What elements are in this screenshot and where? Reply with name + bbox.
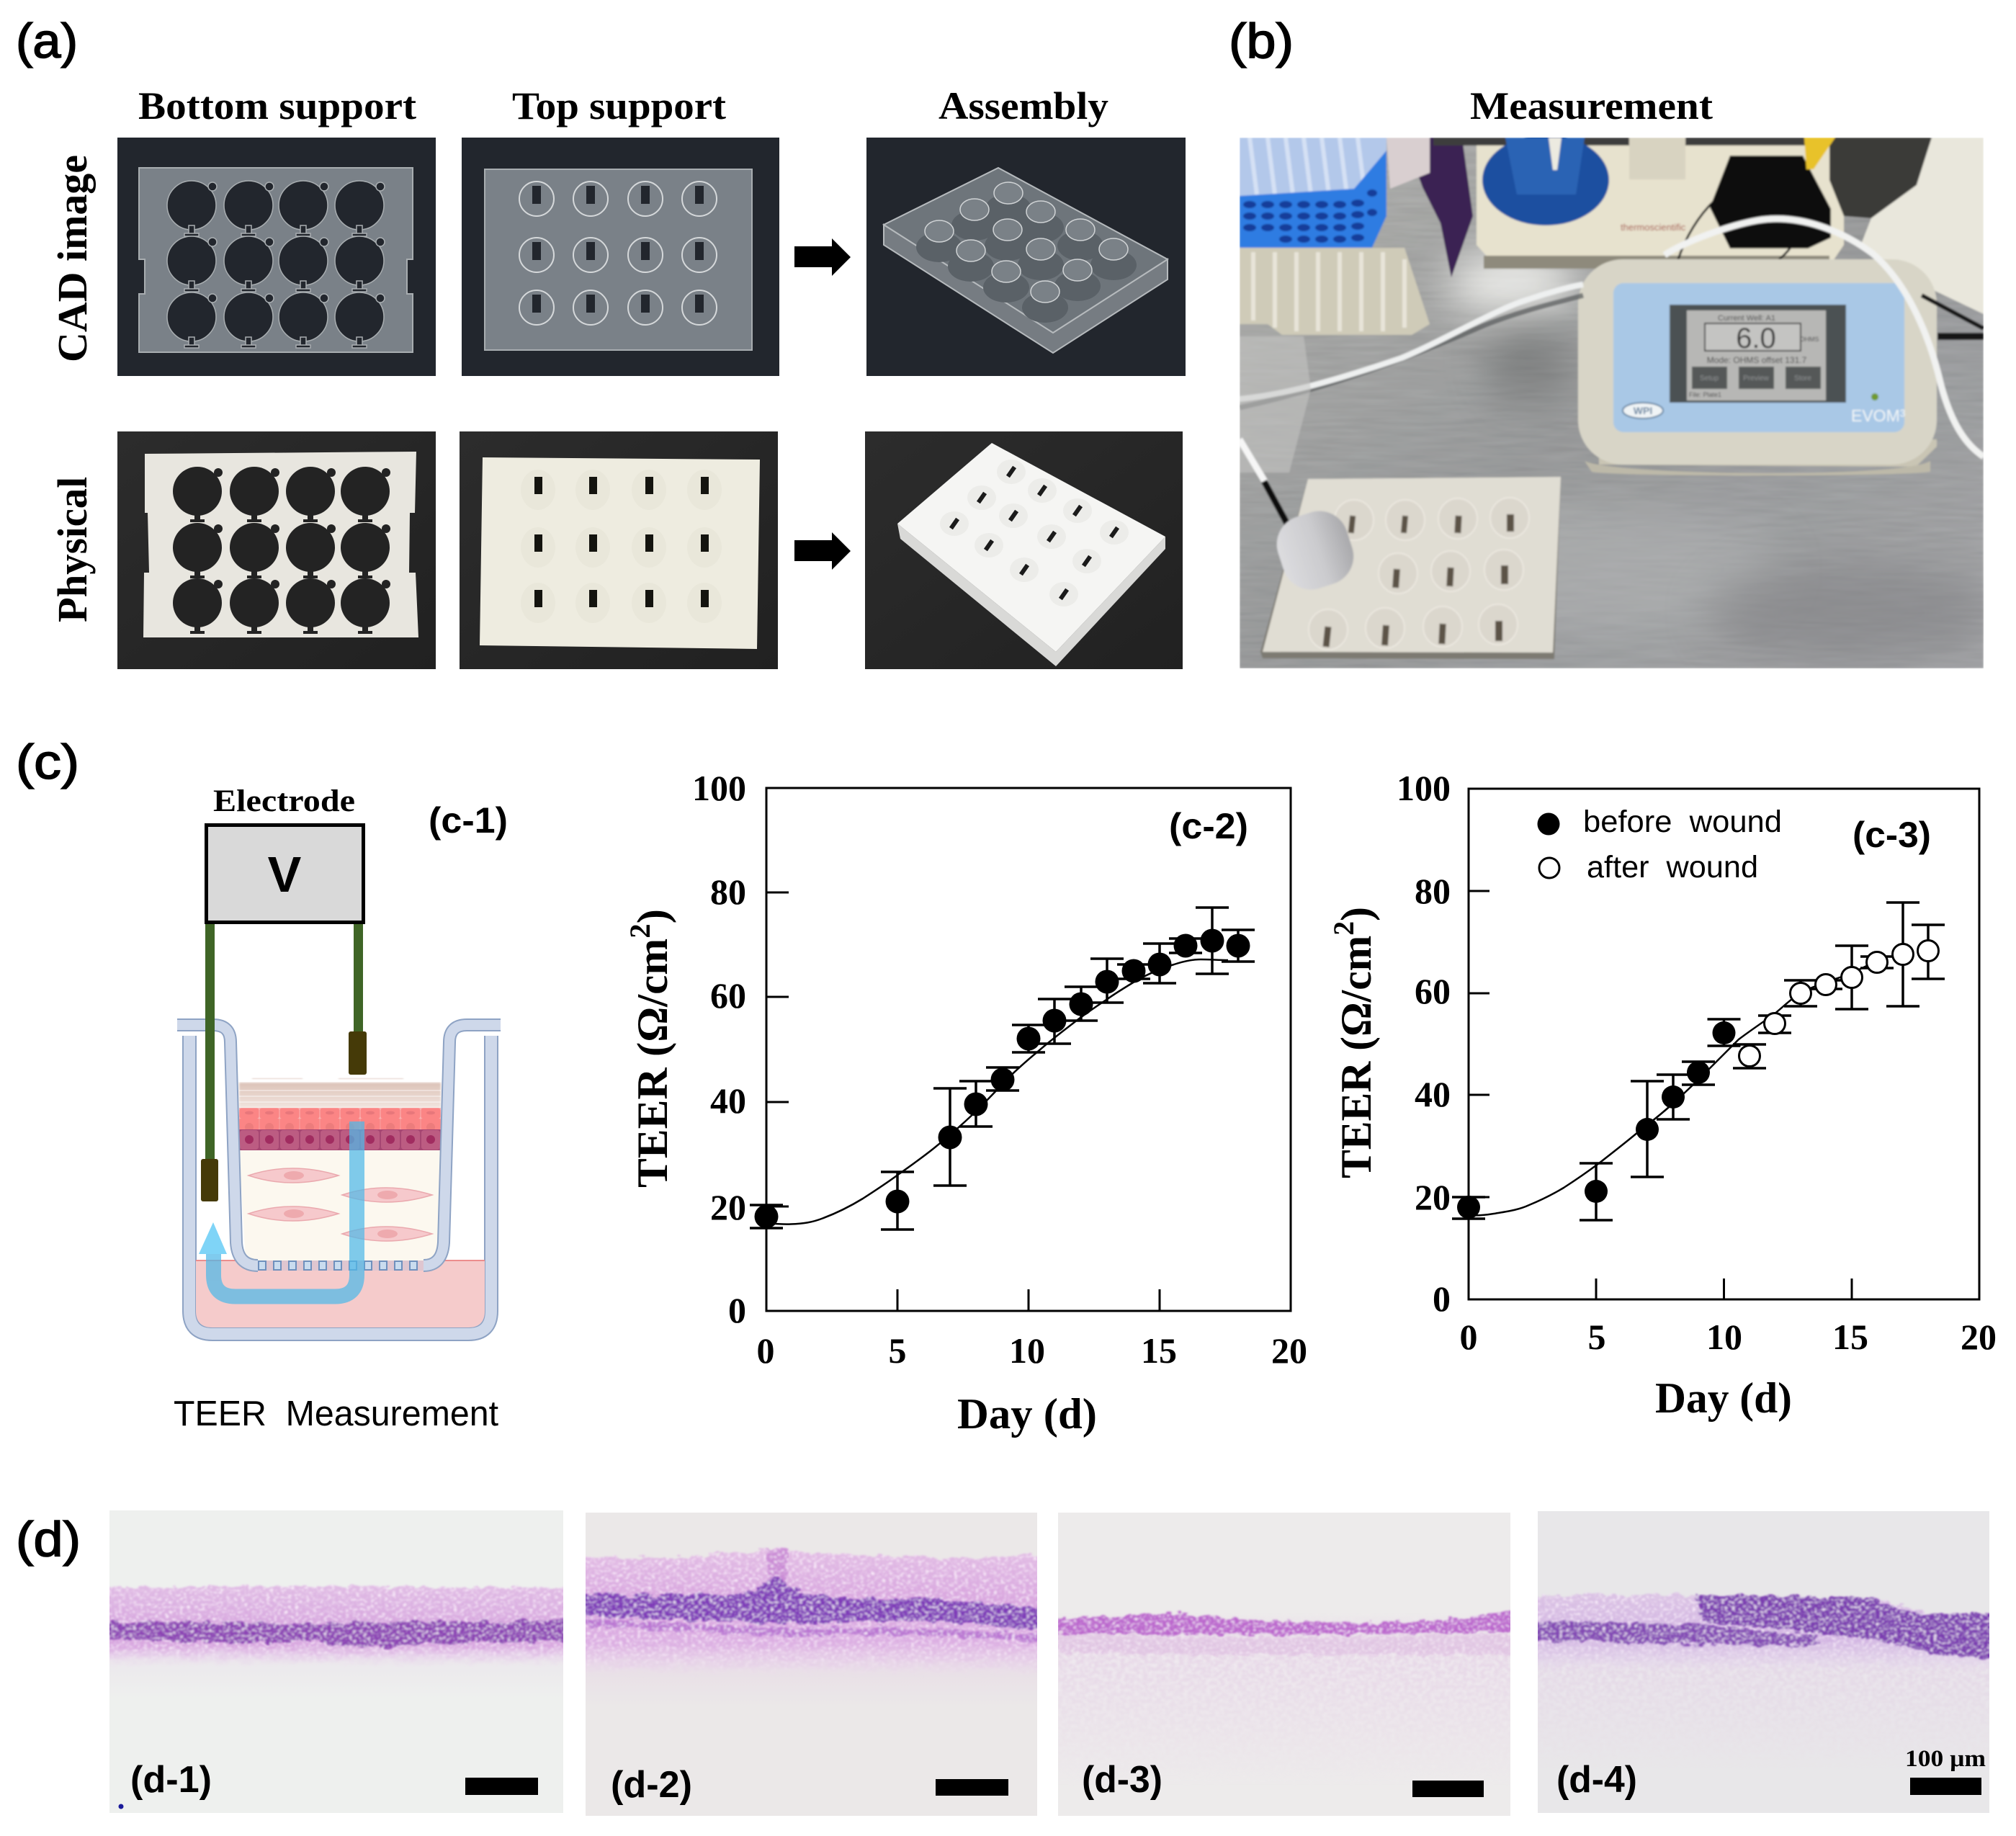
x tick labels: 10 bbox=[1706, 1317, 1742, 1357]
heading: Top support: Top support bbox=[512, 84, 726, 127]
panel: CAD bottom support bbox=[117, 138, 436, 376]
x tick labels: 20 bbox=[1961, 1317, 1997, 1357]
y tick labels bbox=[1397, 768, 1451, 1319]
medium line bbox=[196, 1260, 485, 1261]
data points bbox=[755, 929, 1250, 1229]
x tick labels: 10 bbox=[1009, 1330, 1045, 1371]
chart: c-3 bbox=[1327, 768, 1997, 1422]
EVOM meter bbox=[1599, 439, 1937, 467]
error bars bbox=[1452, 903, 1945, 1220]
y axis title: 2 bbox=[1327, 921, 1360, 936]
y axis title: ) bbox=[629, 909, 676, 923]
panel label (b): (b) bbox=[1229, 14, 1294, 68]
chart label: (c-2) bbox=[1169, 806, 1248, 846]
label d-1: (d-1) bbox=[130, 1759, 212, 1801]
pipette tip box, clear lower part bbox=[1240, 248, 1430, 335]
right device bbox=[1861, 138, 1984, 314]
x tick labels: 5 bbox=[1587, 1317, 1606, 1357]
left wire bbox=[205, 924, 215, 1160]
panel: measurement photo: EVOM³ bbox=[1851, 406, 1906, 425]
y tick labels bbox=[692, 768, 746, 1330]
culture medium bbox=[196, 1260, 485, 1327]
left electrode tip bbox=[201, 1159, 218, 1201]
y tick labels: 0 bbox=[1433, 1279, 1451, 1319]
fit curve bbox=[766, 959, 1228, 1224]
panel: histology d-1 bbox=[86, 1510, 591, 1813]
y tick labels: 80 bbox=[1415, 871, 1451, 911]
panel: physical top support bbox=[460, 431, 778, 669]
thermo base bbox=[1477, 138, 1844, 261]
panel: measurement photo: 6.0 bbox=[1736, 323, 1776, 354]
panel: measurement photo: WPI bbox=[1634, 405, 1652, 416]
panel: c-1 TEER diagram bbox=[174, 784, 508, 1433]
y tick labels: 60 bbox=[710, 975, 746, 1016]
ticks bbox=[766, 892, 1160, 1311]
x tick labels: 0 bbox=[1459, 1317, 1478, 1357]
label d-4: (d-4) bbox=[1556, 1759, 1637, 1801]
clear culture plate bbox=[1240, 336, 1311, 473]
panel: physical assembly bbox=[865, 431, 1183, 669]
y tick labels: 20 bbox=[710, 1187, 746, 1227]
legend bbox=[1537, 805, 1782, 885]
ticks bbox=[1469, 891, 1852, 1299]
y axis title: TEER (Ω/cm bbox=[1332, 933, 1380, 1178]
x tick labels: 15 bbox=[1141, 1330, 1177, 1371]
row label: Physical: Physical bbox=[49, 477, 96, 622]
y axis title: TEER (Ω/cm bbox=[629, 943, 676, 1188]
x tick labels bbox=[756, 1330, 1307, 1371]
panel: measurement photo: Preview bbox=[1743, 375, 1770, 382]
epidermal cells bbox=[239, 1108, 441, 1150]
x tick labels: 20 bbox=[1271, 1330, 1307, 1371]
artefact dot bbox=[118, 1804, 124, 1809]
frame bbox=[1469, 789, 1979, 1299]
x tick labels bbox=[1459, 1317, 1997, 1357]
x tick labels: 15 bbox=[1832, 1317, 1868, 1357]
purple item bbox=[1418, 138, 1474, 277]
scale bar bbox=[465, 1778, 538, 1795]
filled points: before wound bbox=[1457, 1021, 1736, 1219]
fibroblasts bbox=[248, 1168, 432, 1241]
frame bbox=[766, 788, 1291, 1311]
y tick labels: 60 bbox=[1415, 971, 1451, 1011]
black power unit bbox=[1710, 156, 1831, 248]
scale bar bbox=[1412, 1781, 1484, 1797]
cream matrix bbox=[239, 1150, 441, 1262]
y tick labels: 0 bbox=[728, 1290, 746, 1330]
heading: Assembly: Assembly bbox=[938, 84, 1108, 127]
voltmeter box bbox=[206, 825, 363, 922]
scale bar bbox=[1910, 1778, 1981, 1795]
panel: measurement photo: Mode: OHMS offset 131.7 bbox=[1707, 355, 1807, 365]
legend: after wound bbox=[1587, 850, 1758, 885]
y tick labels: 20 bbox=[1415, 1177, 1451, 1217]
fit curve bbox=[1469, 960, 1878, 1215]
membrane bbox=[255, 1260, 426, 1271]
panel: measurement photo: Store bbox=[1794, 375, 1811, 382]
x axis title: Day (d) bbox=[957, 1390, 1097, 1438]
arrow: physical to assembly bbox=[794, 532, 851, 570]
blue current arrow bbox=[199, 1121, 357, 1297]
x axis title: Day (d) bbox=[1655, 1374, 1792, 1422]
electrode probe bbox=[1240, 439, 1265, 483]
panel label (c): (c) bbox=[16, 735, 79, 789]
y tick labels: 40 bbox=[710, 1080, 746, 1121]
caption: TEER Measurement bbox=[174, 1394, 498, 1433]
panel label (d): (d) bbox=[16, 1512, 81, 1567]
panel: measurement photo: OHMS bbox=[1799, 336, 1819, 343]
right electrode tip bbox=[349, 1031, 367, 1075]
label: Electrode: Electrode bbox=[213, 784, 355, 818]
x tick labels: 5 bbox=[889, 1330, 906, 1371]
right wire bbox=[354, 924, 363, 1032]
y tick labels: 100 bbox=[1397, 768, 1451, 808]
heading: Bottom support: Bottom support bbox=[138, 84, 416, 127]
dark rack stripe bbox=[1433, 138, 1937, 145]
panel: histology d-2 bbox=[562, 1513, 1066, 1816]
y axis title: ) bbox=[1332, 907, 1380, 921]
panel: histology d-4 bbox=[1513, 1511, 2010, 1813]
scale bar bbox=[936, 1779, 1008, 1796]
insert walls fill bbox=[177, 1025, 501, 1266]
label d-3: (d-3) bbox=[1082, 1759, 1162, 1801]
y tick labels: 40 bbox=[1415, 1074, 1451, 1114]
chart: c-2 bbox=[624, 768, 1307, 1438]
panel: histology d-3 bbox=[1037, 1513, 1534, 1816]
chart label: (c-3) bbox=[1853, 815, 1931, 855]
insert walls bbox=[177, 1025, 501, 1266]
stratum corneum bbox=[239, 1078, 441, 1108]
legend: before wound bbox=[1583, 805, 1782, 839]
heading: Measurement: Measurement bbox=[1470, 84, 1713, 127]
outer well bbox=[189, 1036, 491, 1334]
pipette tips bbox=[1240, 138, 1386, 197]
panel: physical bottom support bbox=[117, 431, 436, 669]
panel: measurement photo: Current Well: A1 bbox=[1718, 314, 1775, 323]
blue tip rack bbox=[1240, 151, 1386, 248]
panel: CAD top support bbox=[462, 138, 779, 376]
panel label (a): (a) bbox=[16, 14, 78, 68]
x tick labels: 0 bbox=[756, 1330, 775, 1371]
blue cone bbox=[1482, 135, 1609, 225]
panel: CAD assembly bbox=[866, 138, 1186, 376]
steel table bbox=[1240, 138, 1984, 668]
thermo brand text: thermoscientific bbox=[1621, 222, 1686, 233]
panel: measurement photo bbox=[1240, 135, 1995, 668]
error bars bbox=[750, 908, 1255, 1230]
V label: V bbox=[268, 846, 302, 903]
arrow: CAD to assembly bbox=[794, 238, 851, 276]
y tick labels: 100 bbox=[692, 768, 746, 808]
y tick labels: 80 bbox=[710, 872, 746, 912]
open points: after wound bbox=[1739, 941, 1939, 1066]
label d-2: (d-2) bbox=[611, 1764, 692, 1806]
outer well fill bbox=[189, 1036, 491, 1334]
dark cables area bbox=[1829, 138, 1932, 218]
panel: measurement photo: Setup bbox=[1700, 375, 1719, 382]
support plate bbox=[1260, 477, 1561, 659]
post bbox=[1629, 138, 1685, 179]
y axis title: 2 bbox=[624, 923, 656, 939]
label: c-1: (c-1) bbox=[429, 800, 508, 841]
row label: CAD image: CAD image bbox=[49, 155, 96, 362]
white cables bbox=[1240, 295, 1583, 408]
scale caption: 100 μm bbox=[1905, 1746, 1986, 1772]
panel: measurement photo: File: Plate1 bbox=[1689, 391, 1721, 398]
